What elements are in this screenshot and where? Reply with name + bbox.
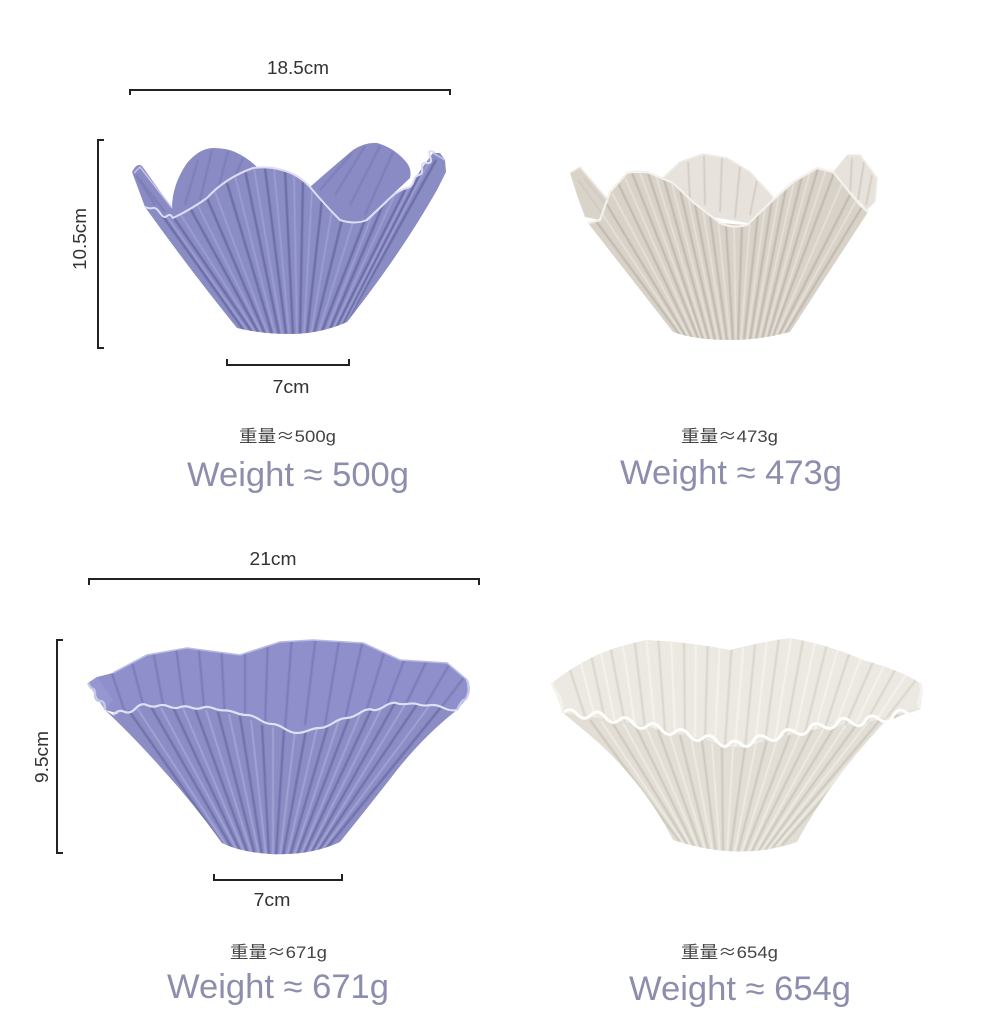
dimension: top width 18.5cm [130,58,450,95]
dimension: base 7cm [227,359,349,397]
Chinese weight label: 重量≈654g [681,938,778,963]
panel: large beige bowl [552,630,922,1008]
panel: small beige bowl [570,154,877,492]
dimension: base 7cm: 7cm [272,377,310,397]
dimension: top width 21cm [89,549,479,585]
dimension: height 9.5cm: 9.5cm [32,731,52,783]
image: beige scalloped bowl [570,154,877,340]
dimension: base 7cm [214,874,342,910]
English weight label: Weight ≈ 473g [620,454,842,492]
dimension: top width 18.5cm: 18.5cm [267,58,329,78]
English weight label: Weight ≈ 500g [187,456,409,494]
dimension: top width 21cm: 21cm [250,549,296,569]
Chinese weight label: 重量≈671g [230,938,327,963]
panel: large purple bowl [32,549,479,1006]
dimension: base 7cm: 7cm [254,890,290,910]
Chinese weight label: 重量≈500g [239,422,336,447]
image: purple scalloped bowl [132,143,446,334]
image: purple wide fluted bowl [88,635,469,856]
panel: small purple bowl [70,58,450,494]
English weight label: Weight ≈ 671g [167,968,389,1006]
dimension: height 10.5cm: 10.5cm [70,208,90,270]
English weight label: Weight ≈ 654g [629,970,851,1008]
Chinese weight label: 重量≈473g [681,422,778,447]
image: beige wide fluted bowl [552,630,922,855]
dimension: height 10.5cm [70,140,104,348]
dimension: height 9.5cm [32,640,63,853]
